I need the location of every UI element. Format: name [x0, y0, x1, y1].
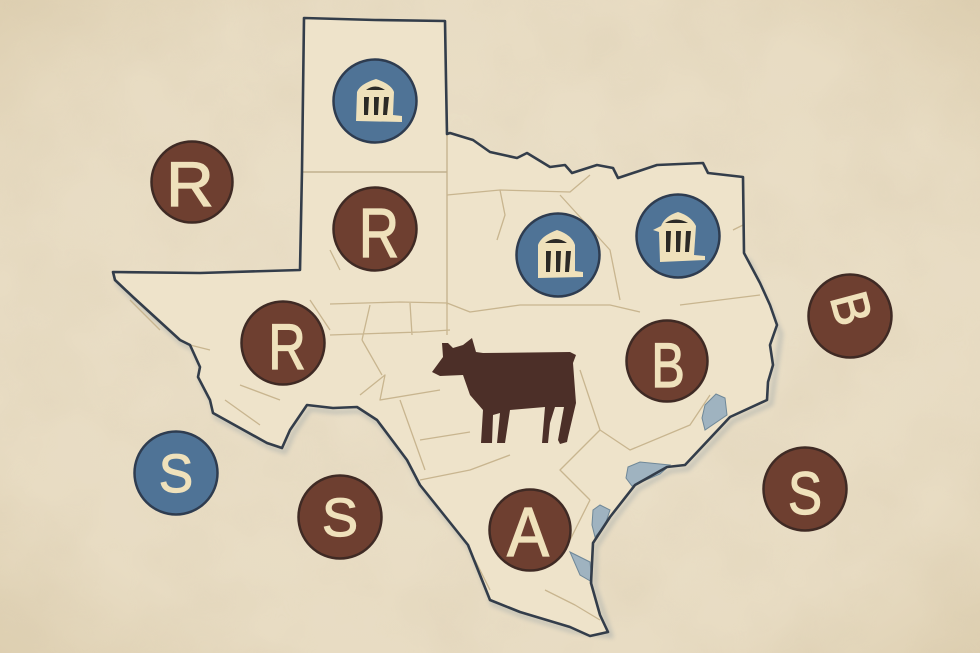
- badge: brown B far east: [808, 274, 892, 358]
- badge: brown B east: B: [651, 331, 685, 401]
- badge: brown S southeast: S: [788, 460, 822, 527]
- badge: brown R upper left: R: [166, 150, 214, 220]
- badge: blue column top: [334, 60, 416, 142]
- badge: brown R panhandle: [334, 188, 416, 272]
- icon: cow silhouette: [432, 338, 576, 444]
- badge: blue S far southwest: [134, 432, 218, 514]
- badge: brown A south: [490, 490, 570, 572]
- badge: brown S southwest: S: [322, 488, 358, 548]
- badge: blue S far southwest: S: [159, 444, 193, 504]
- badge: brown R west: [242, 302, 324, 384]
- badge: brown R west: R: [268, 312, 306, 383]
- badge: brown R panhandle: R: [359, 195, 399, 272]
- badge: brown B far east: B: [819, 285, 884, 331]
- map: Texas outline: [113, 18, 781, 636]
- badge: brown S southwest: [298, 476, 382, 558]
- badge: brown A south: A: [507, 494, 550, 572]
- map: cracks and county lines: [130, 135, 760, 620]
- badge: blue column center: [516, 214, 600, 296]
- badge: brown B east: [626, 320, 708, 402]
- map: bays and coastal water: [570, 394, 727, 582]
- badge: blue column northeast: [636, 194, 720, 278]
- badge: brown S southeast: [764, 448, 846, 530]
- badge: brown R upper left: [152, 142, 232, 222]
